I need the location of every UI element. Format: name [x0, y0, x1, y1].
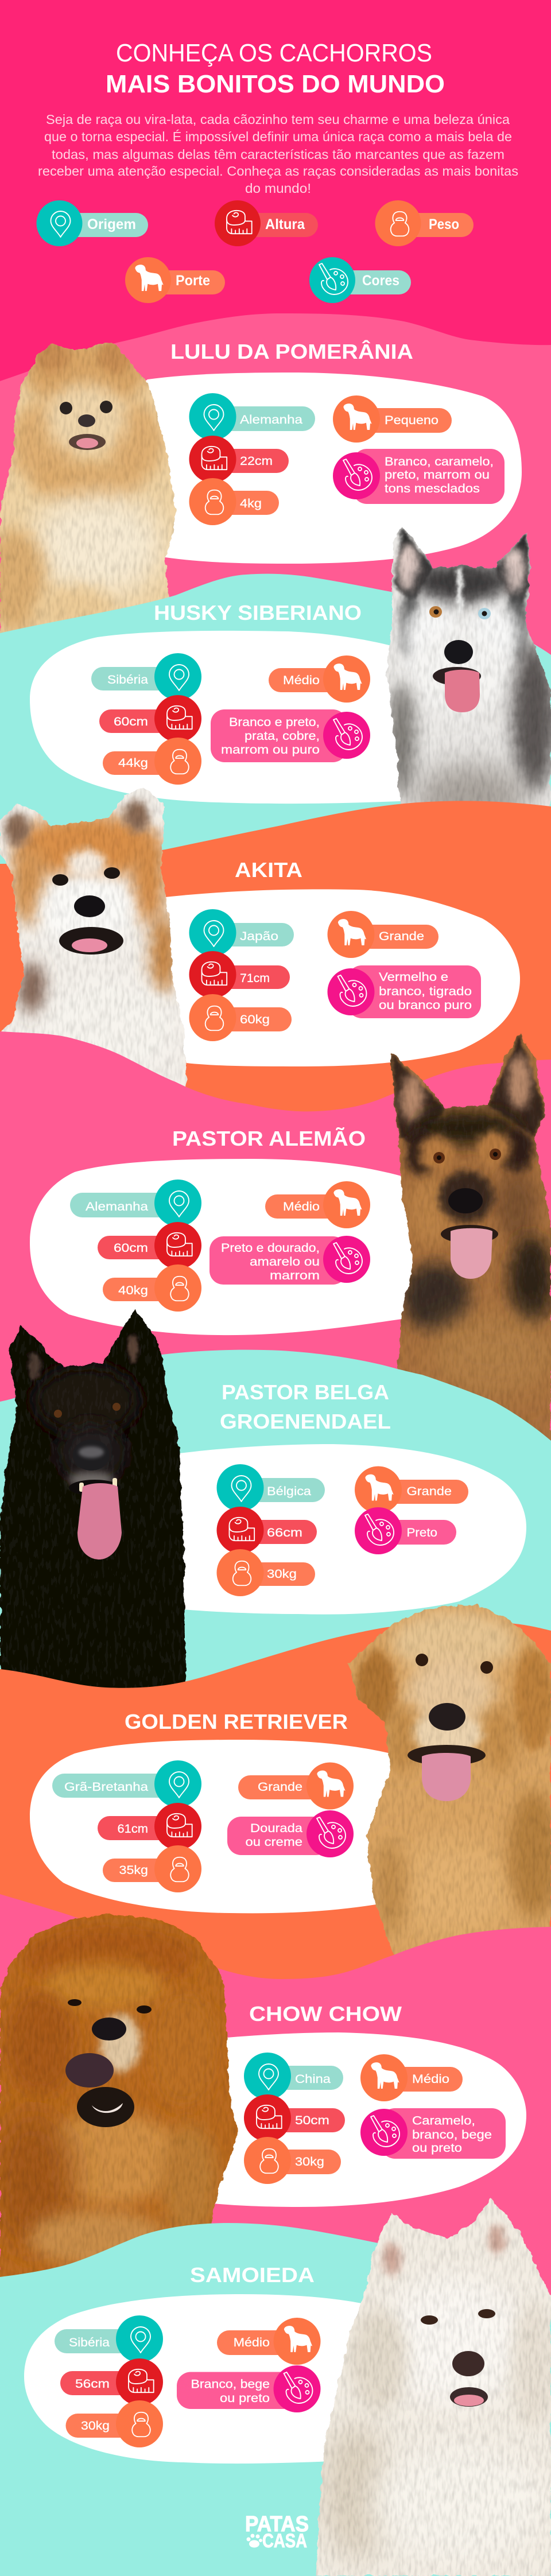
- panel: akita: [0, 787, 551, 1111]
- origem: [217, 1464, 325, 1511]
- altura: [189, 436, 289, 483]
- dog photo: german shepherd: [385, 1027, 551, 1458]
- heading: PASTOR ALEMÃO: [172, 1126, 366, 1150]
- porte: [333, 395, 452, 443]
- origem: [91, 653, 201, 700]
- section background wave: [0, 1621, 551, 1980]
- heading: GOLDEN RETRIEVER: [125, 1710, 348, 1733]
- origem: Alemanha: [240, 413, 302, 426]
- legend: [37, 200, 474, 303]
- title: MAIS BONITOS DO MUNDO: [106, 70, 445, 98]
- porte: [269, 655, 370, 703]
- peso: [65, 2400, 163, 2447]
- origem: [70, 1180, 201, 1227]
- cores: [211, 709, 370, 762]
- altura: 61cm: [117, 1822, 148, 1836]
- peso: [189, 478, 279, 525]
- altura: [189, 951, 290, 998]
- peso: 30kg: [295, 2155, 324, 2168]
- section background wave: [0, 1031, 551, 1492]
- peso: [103, 1264, 201, 1312]
- cores: Dourada: [250, 1822, 302, 1835]
- porte: Grande: [406, 1485, 452, 1498]
- altura: 56cm: [75, 2377, 110, 2391]
- intro paragraph: do mundo!: [245, 181, 311, 196]
- origem: Sibéria: [107, 673, 148, 686]
- white info card: [115, 373, 522, 564]
- heading: CHOW CHOW: [249, 2002, 402, 2026]
- origem: [189, 909, 294, 956]
- cores: marrom ou puro: [221, 743, 320, 756]
- peso: [103, 1845, 201, 1892]
- heading: AKITA: [235, 858, 302, 882]
- heading: [220, 1380, 391, 1433]
- section background wave: [0, 801, 551, 1148]
- legend: peso: [375, 200, 474, 246]
- intro paragraph: todas, mas algumas delas têm características tão marcantes que as fazem: [52, 147, 505, 162]
- heading: HUSKY SIBERIANO: [154, 601, 362, 624]
- altura: [98, 1803, 201, 1850]
- cores: Preto e dourado,: [221, 1242, 320, 1255]
- cores: Branco, caramelo,: [385, 455, 494, 468]
- peso: 30kg: [81, 2419, 110, 2433]
- white info card: [30, 631, 413, 804]
- cores: Branco, bege: [191, 2378, 270, 2391]
- altura: 50cm: [295, 2114, 329, 2127]
- peso: [189, 994, 292, 1041]
- title: [106, 39, 445, 98]
- section background wave: [0, 1894, 551, 2353]
- porte: Grande: [379, 930, 424, 943]
- porte: Médio: [283, 674, 320, 687]
- panel: pastor alemao: [0, 1031, 551, 1441]
- cores: ou branco puro: [379, 999, 472, 1012]
- cores: Branco e preto,: [229, 716, 320, 729]
- legend: origem: Origem: [87, 216, 136, 232]
- dog photo: golden retriever: [344, 1601, 551, 1969]
- panel: chow chow: [0, 1894, 551, 2295]
- cores: tons mesclados: [385, 482, 480, 495]
- white info card: [24, 2294, 367, 2464]
- section background wave: [0, 1350, 551, 1722]
- cores: [360, 2108, 506, 2159]
- origem: Bélgica: [267, 1485, 311, 1498]
- altura: [99, 695, 201, 742]
- peso: 35kg: [119, 1864, 148, 1877]
- porte: [355, 1466, 468, 1513]
- dog photo: chow chow: [0, 1911, 241, 2290]
- heading: LULU DA POMERÂNIA: [170, 339, 413, 363]
- legend: altura: [215, 200, 318, 246]
- origem: Grã-Bretanha: [64, 1780, 148, 1794]
- dog photo: husky: [386, 527, 551, 806]
- legend: cores: Cores: [362, 273, 399, 289]
- panel: lulu da pomerania: [0, 313, 551, 655]
- peso: 4kg: [240, 497, 262, 510]
- origem: Alemanha: [86, 1200, 148, 1213]
- legend: altura: Altura: [265, 216, 305, 232]
- altura: 71cm: [240, 972, 270, 985]
- cores: [227, 1810, 354, 1857]
- origem: [189, 393, 315, 440]
- logo: patas casa: [245, 2512, 309, 2552]
- cores: branco, bege: [412, 2128, 492, 2142]
- intro paragraph: que o torna especial. É impossível definir uma única raça como a mais bela de: [44, 129, 512, 144]
- panel: pastor belga groenendael: [0, 1303, 551, 1722]
- origem: China: [295, 2073, 331, 2086]
- dog photo: samoyed: [313, 2195, 551, 2576]
- cores: marrom: [270, 1269, 320, 1282]
- legend: porte: [125, 257, 225, 303]
- panel: golden retriever: [0, 1601, 551, 1980]
- porte: [217, 2318, 320, 2365]
- origem: Japão: [240, 930, 278, 943]
- cores: [177, 2365, 320, 2412]
- legend: porte: Porte: [176, 273, 210, 289]
- dog photo: pomeranian: [0, 339, 184, 637]
- white info card: [30, 1740, 402, 1913]
- porte: Grande: [258, 1780, 302, 1794]
- panel: samoieda: [0, 2195, 551, 2576]
- legend: peso: Peso: [429, 216, 459, 232]
- section background wave: [0, 574, 551, 918]
- peso: 60kg: [240, 1013, 270, 1026]
- cores: [333, 449, 505, 504]
- cores: Caramelo,: [412, 2115, 475, 2127]
- altura: [244, 2094, 345, 2142]
- cores: [327, 965, 481, 1018]
- white info card: [155, 889, 520, 1066]
- section background wave: [0, 2223, 551, 2576]
- white info card: [207, 2032, 526, 2207]
- logo: patas casa: PATAS: [245, 2512, 309, 2536]
- section background wave: [0, 313, 551, 861]
- origem: [244, 2053, 343, 2100]
- dog photo: black groenendael: [0, 1303, 195, 1705]
- intro header: [37, 39, 518, 303]
- porte: [265, 1181, 370, 1228]
- porte: [238, 1762, 354, 1809]
- cores: ou preto: [220, 2392, 270, 2405]
- logo: patas casa: CASA: [262, 2530, 307, 2552]
- cores: branco, tigrado: [379, 985, 472, 998]
- cores: amarelo ou: [250, 1255, 320, 1268]
- peso: 30kg: [267, 1568, 297, 1581]
- legend: origem: [37, 200, 148, 246]
- peso: [103, 738, 201, 785]
- porte: [360, 2054, 463, 2101]
- intro paragraph: Seja de raça ou vira-lata, cada cãozinho tem seu charme e uma beleza única: [46, 112, 510, 127]
- altura: [98, 1222, 201, 1269]
- intro paragraph: receber uma atenção especial. Conheça as raças consideradas as mais bonitas: [38, 164, 518, 179]
- peso: 40kg: [118, 1284, 148, 1297]
- origem: Sibéria: [69, 2336, 110, 2349]
- porte: Médio: [412, 2073, 449, 2086]
- cores: Preto: [406, 1526, 437, 1539]
- dog photo: akita: [0, 786, 195, 1096]
- cores: [355, 1507, 456, 1554]
- cores: ou preto: [412, 2142, 462, 2155]
- peso: [217, 1549, 315, 1596]
- porte: [327, 911, 439, 958]
- cores: [209, 1236, 370, 1285]
- panel: husky siberiano: [0, 527, 551, 864]
- title: CONHEÇA OS CACHORROS: [116, 39, 432, 67]
- white info card: [30, 1159, 413, 1335]
- altura: 66cm: [267, 1526, 302, 1539]
- heading: PASTOR BELGA: [222, 1380, 389, 1404]
- intro paragraph: [38, 112, 518, 196]
- altura: 60cm: [114, 715, 148, 728]
- cores: Vermelho e: [379, 971, 448, 984]
- porte: Pequeno: [385, 414, 439, 427]
- cores: preto, marrom ou: [385, 468, 490, 482]
- peso: 44kg: [118, 756, 148, 770]
- porte: Médio: [283, 1200, 320, 1213]
- altura: 22cm: [240, 455, 273, 468]
- porte: Médio: [234, 2336, 270, 2349]
- peso: [244, 2137, 341, 2184]
- altura: [217, 1507, 317, 1554]
- altura: 60cm: [114, 1242, 148, 1255]
- heading: GROENENDAEL: [220, 1410, 391, 1433]
- origem: [55, 2315, 163, 2362]
- cores: prata, cobre,: [245, 730, 320, 743]
- heading: SAMOIEDA: [190, 2263, 315, 2287]
- origem: [52, 1760, 201, 1807]
- legend: cores: [309, 257, 411, 303]
- altura: [60, 2358, 163, 2406]
- cores: ou creme: [246, 1836, 302, 1849]
- white info card: [166, 1444, 526, 1615]
